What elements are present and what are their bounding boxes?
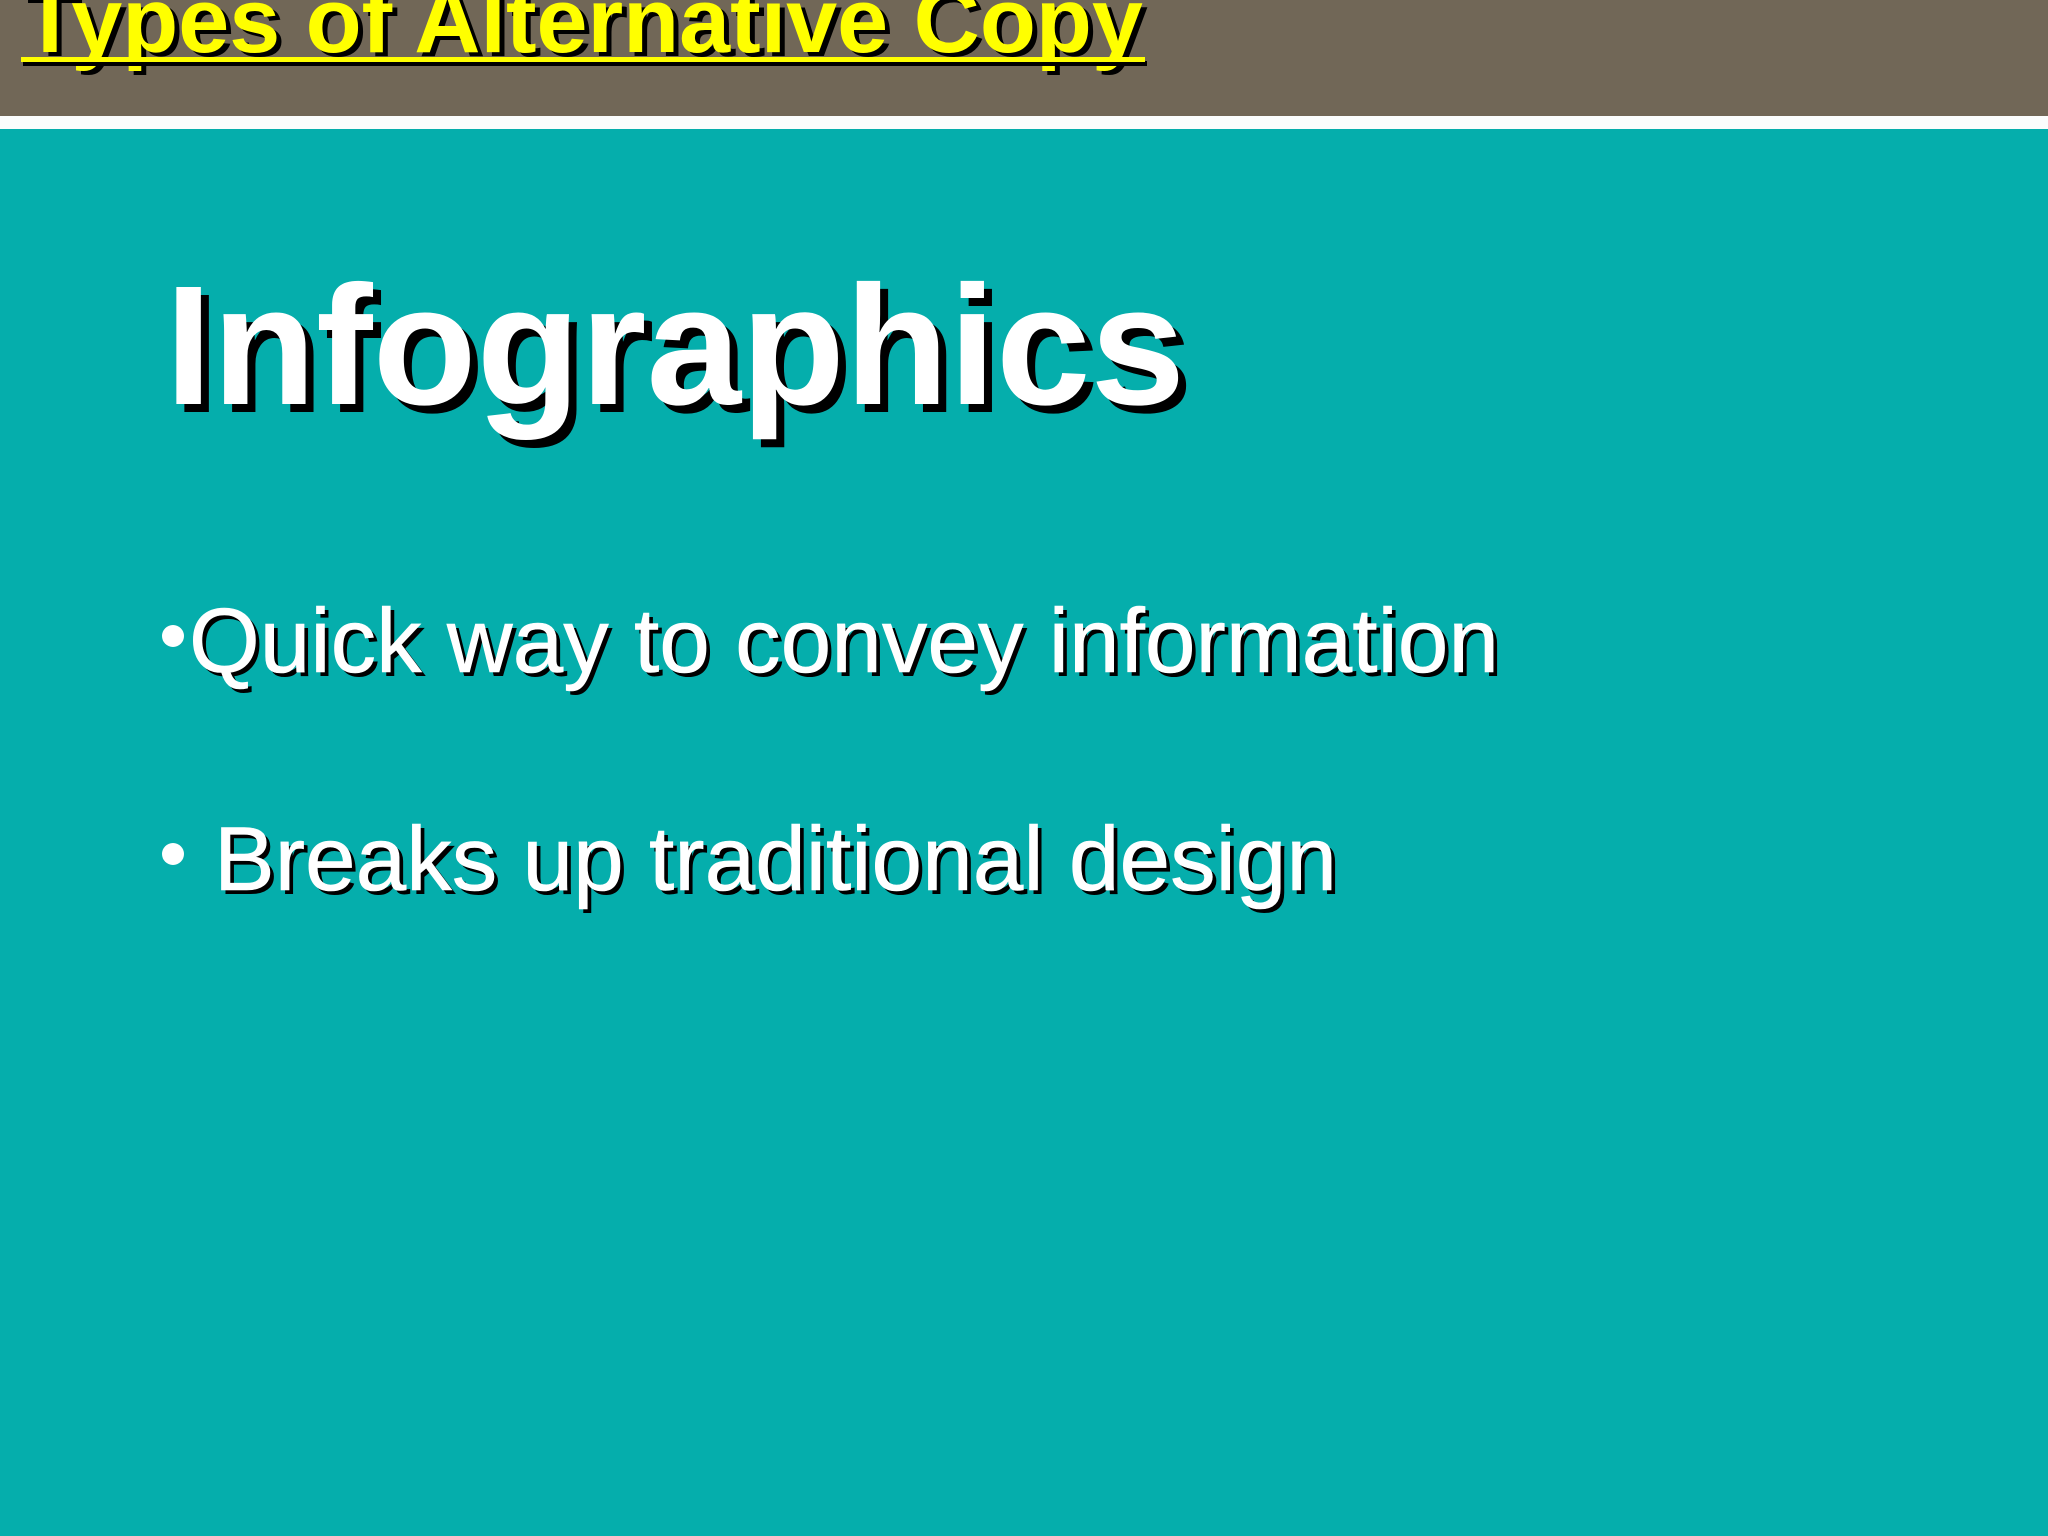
bullet text 1: Quick way to convey information <box>189 591 1499 692</box>
title underline <box>21 57 1145 62</box>
header band <box>0 0 2048 116</box>
bullet dot 2 <box>162 843 184 865</box>
bullet text 2: Breaks up traditional design <box>214 809 1337 910</box>
heading: Infographics: Infographics <box>165 251 1185 441</box>
bullet dot 1 <box>162 625 184 647</box>
white divider band <box>0 116 2048 129</box>
